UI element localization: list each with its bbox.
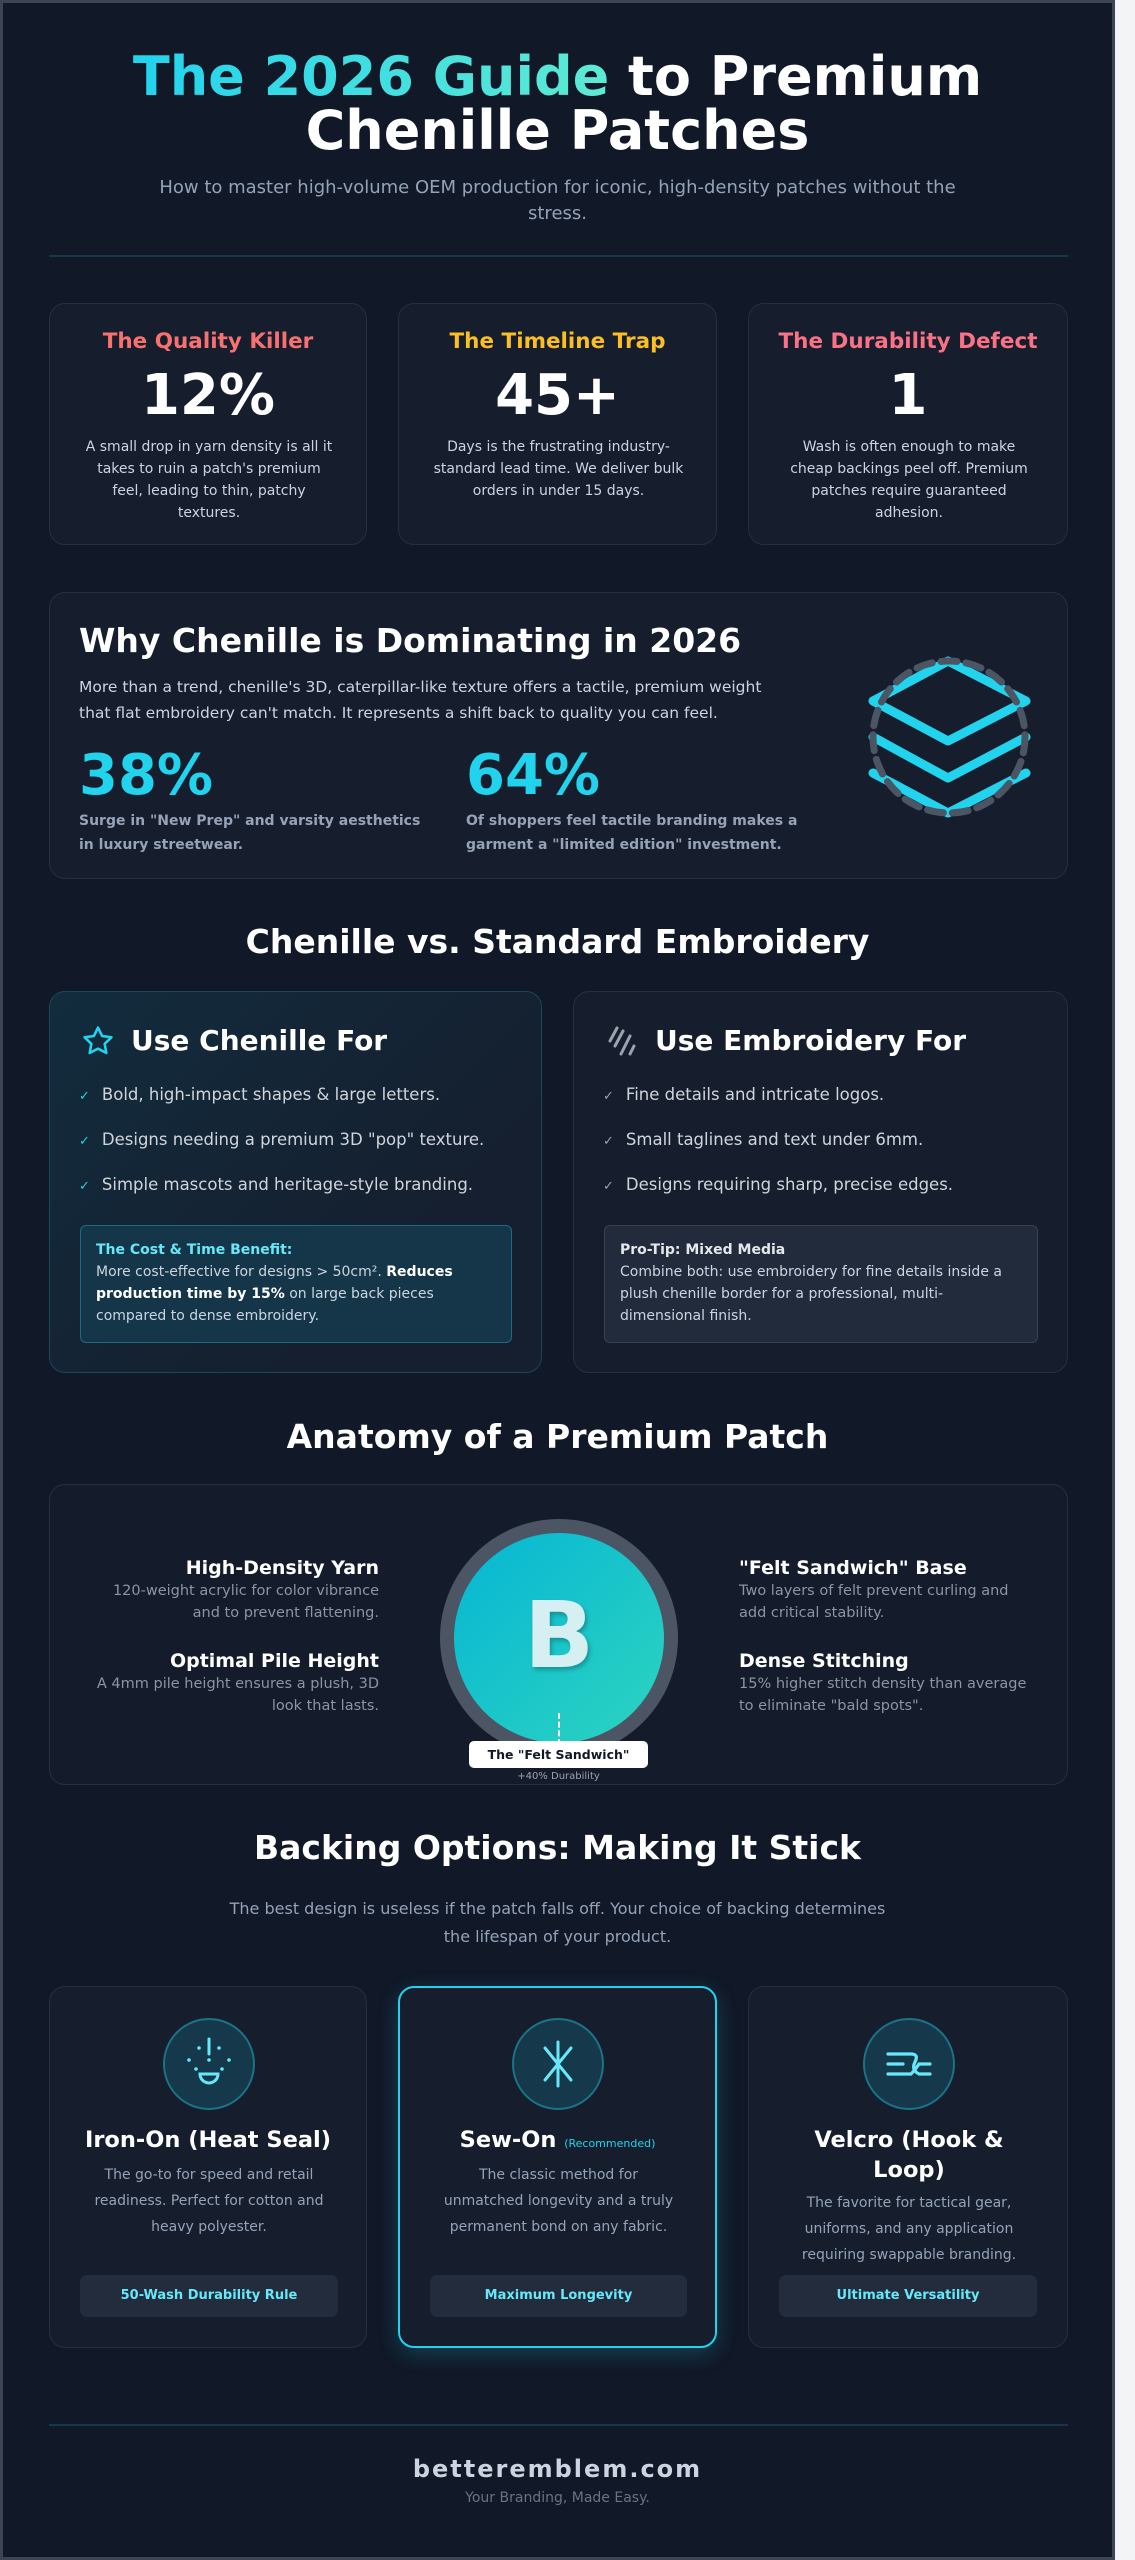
description: The classic method for unmatched longevity and a truly permanent bond on any fabric.: [444, 2167, 673, 2235]
heading: Use Embroidery For: [655, 1024, 966, 1057]
stat card: quality killer: A small drop in yarn density is all it takes to ruin a patch's premium feel, leading to thin, patchy textures.: [86, 439, 332, 521]
list: ✓ Designs needing a premium 3D "pop" texture.: [79, 1130, 484, 1149]
title: The 2026 Guide to Premium: [133, 45, 982, 108]
text: dense stitching: 15% higher stitch density than average to eliminate "bald spots".: [739, 1676, 1026, 1714]
list: ✓ Bold, high-impact shapes & large letters.: [79, 1085, 440, 1104]
badge: [80, 2275, 338, 2317]
title: Velcro (Hook & Loop): [814, 2127, 1004, 2183]
stat card: durability defect: The Durability Defect: [779, 329, 1037, 354]
callout: cost & time: [80, 1225, 512, 1343]
card: sew-on: [398, 1986, 717, 2348]
stat 64%: [466, 743, 797, 853]
stat card: timeline trap: 45+: [495, 363, 620, 428]
label: felt sandwich: [469, 1741, 648, 1768]
title: Chenille Patches: [306, 99, 809, 162]
list: ✓ Small taglines and text under 6mm.: [603, 1130, 923, 1149]
heading: Use Chenille For: [131, 1024, 387, 1057]
text: high-density yarn: 120-weight acrylic for color vibrance and to prevent flattening.: [113, 1583, 379, 1621]
badge: 50-Wash Durability Rule: [121, 2288, 297, 2303]
stat card: quality killer: 12%: [141, 363, 275, 428]
icon: stitches: [608, 1026, 636, 1056]
subtitle: How to master high-volume OEM production for iconic, high-density patches without the stress.: [159, 177, 956, 224]
text: pile height: A 4mm pile height ensures a plush, 3D look that lasts.: [97, 1676, 379, 1714]
title: Iron-On (Heat Seal): [85, 2127, 331, 2153]
icon: iron: [163, 2018, 255, 2110]
text: high-density yarn: High-Density Yarn: [186, 1557, 379, 1579]
patch diagram: [440, 1519, 678, 1757]
text: dense stitching: [739, 1650, 1026, 1714]
heading: anatomy: Anatomy of a Premium Patch: [287, 1417, 828, 1456]
callout: pro-tip: Pro-Tip: Mixed Media: [620, 1242, 785, 1258]
label: felt sandwich: The "Felt Sandwich": [488, 1747, 629, 1762]
icon: velcro: [863, 2018, 955, 2110]
list: [603, 1085, 953, 1194]
callout: cost & time: The Cost & Time Benefit:: [96, 1242, 292, 1258]
badge: Ultimate Versatility: [837, 2288, 979, 2303]
card: iron-on: [49, 1986, 367, 2348]
patch diagram: B: [524, 1582, 594, 1689]
badge: [430, 2275, 687, 2317]
list: ✓ Fine details and intricate logos.: [603, 1085, 884, 1104]
stat 64%: 64%: [466, 743, 600, 808]
stat card: quality killer: The Quality Killer: [103, 329, 313, 354]
panel: use embroidery for: [573, 991, 1068, 1373]
stat card: durability defect: [748, 303, 1068, 545]
badge: Maximum Longevity: [485, 2288, 632, 2303]
heading: backing: Backing Options: Making It Stick: [254, 1828, 861, 1867]
stat 38%: [79, 743, 420, 853]
card: velcro: [748, 1986, 1068, 2348]
icon: star: [83, 1026, 113, 1054]
list: [79, 1085, 484, 1194]
stat 64%: Of shoppers feel tactile branding makes a garment a "limited edition" investment.: [466, 813, 797, 853]
stat 38%: 38%: [79, 743, 213, 808]
panel: anatomy: [49, 1484, 1068, 1785]
callout: pro-tip: Combine both: use embroidery for fine details inside a plush chenille border for a professional, multi-dimensional finish.: [620, 1264, 1002, 1324]
text: dense stitching: Dense Stitching: [739, 1650, 909, 1672]
list: ✓ Simple mascots and heritage-style branding.: [79, 1175, 473, 1194]
text: high-density yarn: [113, 1557, 379, 1621]
badge: [779, 2275, 1037, 2317]
panel: why chenille: [49, 592, 1068, 879]
stat card: durability defect: Wash is often enough to make cheap backings peel off. Premium patches require guaranteed adhesion.: [790, 439, 1028, 521]
text: pile height: [97, 1650, 379, 1714]
icon: layers: [868, 656, 1030, 818]
stat 38%: Surge in "New Prep" and varsity aesthetics in luxury streetwear.: [79, 813, 420, 853]
text: pile height: Optimal Pile Height: [170, 1650, 379, 1672]
description: The favorite for tactical gear, uniforms, and any application requiring swappable branding.: [802, 2195, 1016, 2263]
heading: Why Chenille is Dominating in 2026: [79, 621, 741, 660]
text: felt base: "Felt Sandwich" Base: [739, 1557, 967, 1579]
panel: use chenille for: [49, 991, 542, 1373]
icon: needle: [512, 2018, 604, 2110]
title: Sew-On (Recommended): [460, 2127, 655, 2153]
heading: comparison: Chenille vs. Standard Embroidery: [246, 922, 869, 961]
stat card: timeline trap: [398, 303, 717, 545]
text: felt base: Two layers of felt prevent curling and add critical stability.: [739, 1583, 1008, 1621]
callout: pro-tip: [604, 1225, 1038, 1343]
stat card: timeline trap: Days is the frustrating industry-standard lead time. We deliver bulk orders in under 15 days.: [434, 439, 683, 499]
stat card: quality killer: [49, 303, 367, 545]
stat card: timeline trap: The Timeline Trap: [450, 329, 665, 354]
footer tagline: Your Branding, Made Easy.: [465, 2490, 650, 2506]
description: The go-to for speed and retail readiness. Perfect for cotton and heavy polyester.: [94, 2167, 324, 2235]
title: [133, 45, 982, 162]
backing intro: The best design is useless if the patch falls off. Your choice of backing determines the lifespan of your product.: [230, 1899, 885, 1946]
text: felt base: [738, 1557, 1008, 1621]
footer brand: betteremblem.com: [413, 2455, 702, 2483]
list: ✓ Designs requiring sharp, precise edges.: [603, 1175, 953, 1194]
panel: anatomy: +40% Durability: [517, 1771, 600, 1782]
description: More than a trend, chenille's 3D, caterpillar-like texture offers a tactile, premium weight that flat embroidery can't match. It represents a shift back to quality you can feel.: [79, 678, 761, 722]
callout: cost & time: More cost-effective for designs > 50cm². Reduces production time by 15% on large back pieces compared to dense embroidery.: [96, 1264, 453, 1324]
stat card: durability defect: 1: [889, 363, 927, 428]
